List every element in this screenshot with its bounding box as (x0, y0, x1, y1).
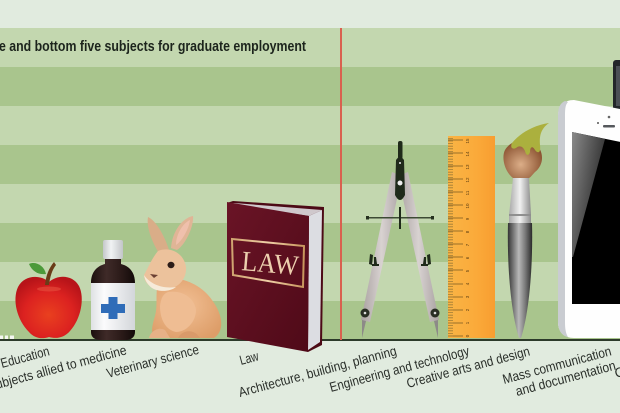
ruler numbers: 10 (465, 203, 470, 209)
ruler numbers (465, 138, 470, 337)
ruler numbers: 0 (465, 334, 470, 337)
icon: smartphone behind (613, 60, 620, 120)
icon: rabbit (144, 216, 221, 338)
ruler numbers: 2 (465, 308, 470, 311)
icon: compasses (360, 141, 440, 338)
ruler numbers: 5 (465, 269, 470, 272)
ruler numbers: 4 (465, 282, 470, 285)
ruler numbers: 15 (465, 138, 470, 144)
icon: apple (15, 262, 82, 338)
ruler numbers: 11 (465, 190, 470, 195)
axis labels (0, 342, 620, 400)
title: e and bottom five subjects for graduate employment (0, 39, 306, 55)
ruler numbers: 9 (465, 217, 470, 220)
baseline axis (0, 339, 620, 341)
label: law: Law (238, 348, 260, 368)
icon: ruler (448, 136, 495, 338)
gold frame (232, 239, 304, 287)
divider line between bottom and top five (340, 28, 342, 340)
ruler numbers: 8 (465, 230, 470, 233)
ruler numbers: 3 (465, 295, 470, 298)
icon: law book (227, 201, 324, 352)
ruler numbers: 7 (465, 243, 470, 246)
label: veterinary science: Veterinary science (105, 342, 201, 381)
label: engineering and technology: Engineering and technology (328, 343, 471, 395)
label: education: Education (0, 343, 51, 371)
data dots (0, 336, 14, 339)
ruler numbers: 1 (465, 321, 470, 324)
label: creative arts and design: Creative arts and design (405, 344, 531, 391)
ruler numbers: 12 (465, 177, 470, 183)
icon: smartphone (558, 100, 620, 338)
ruler numbers: 6 (465, 256, 470, 259)
ruler ticks (448, 140, 463, 336)
law lettering: LAW (240, 246, 300, 282)
icon: medicine bottle (91, 240, 135, 340)
ruler numbers: 13 (465, 164, 470, 170)
icon: paintbrush (503, 123, 549, 338)
screen (572, 132, 620, 304)
ruler numbers: 14 (465, 151, 470, 157)
label: architecture, building, planning: Architecture, building, planning (237, 343, 398, 400)
